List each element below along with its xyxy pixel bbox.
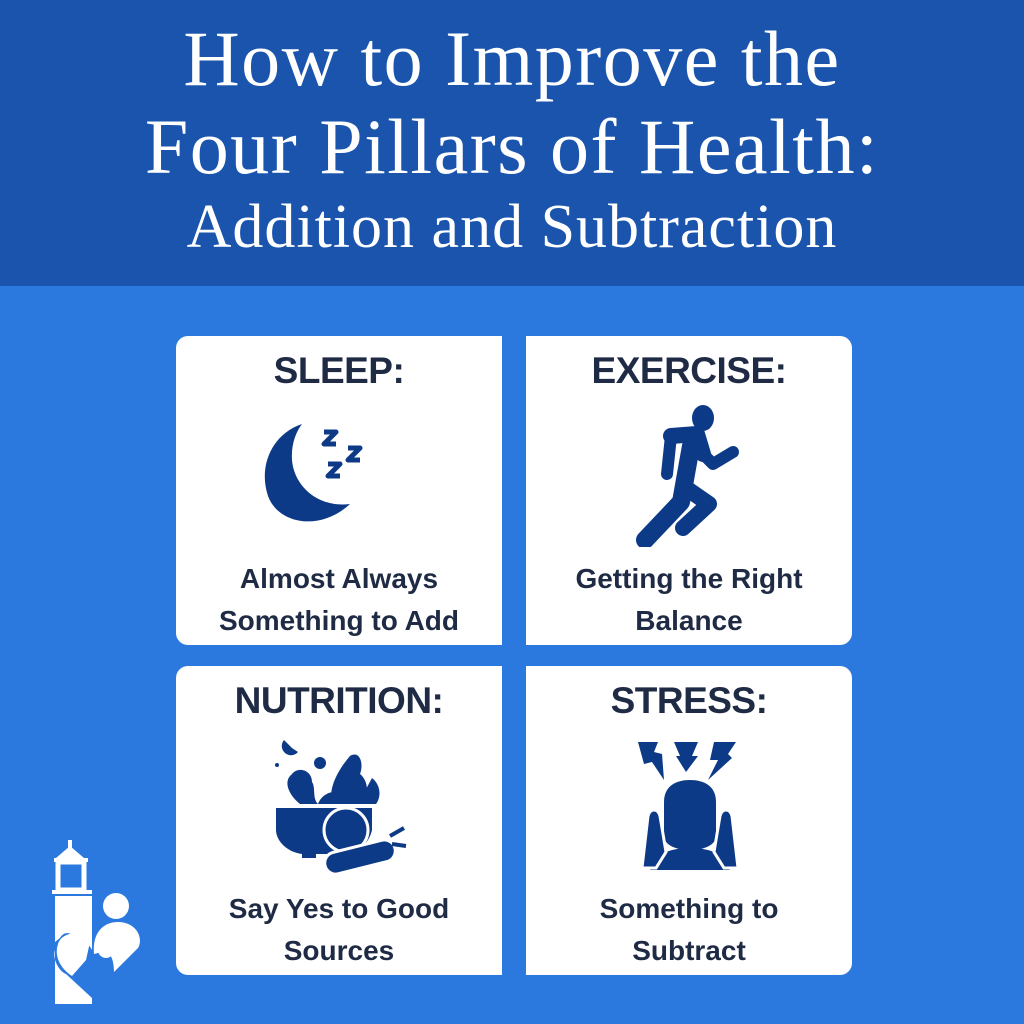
icon: runner	[636, 405, 739, 547]
heading: exercise: EXERCISE:	[592, 350, 786, 391]
text: sleep: Almost Always	[240, 563, 438, 594]
text: nutrition: Say Yes to Good	[229, 893, 449, 924]
logo: lighthouse with family	[52, 840, 140, 1004]
text: stress: Subtract	[632, 935, 746, 966]
text: exercise	[575, 563, 803, 636]
panel: nutrition	[176, 666, 502, 975]
text: sleep: Something to Add	[219, 605, 459, 636]
text: exercise: Balance	[635, 605, 743, 636]
panel: stress	[526, 666, 852, 975]
subtitle: Addition and Subtraction	[187, 193, 837, 261]
text: sleep	[219, 563, 459, 636]
text: exercise: Getting the Right	[575, 563, 803, 594]
text: stress	[600, 893, 778, 966]
icon: salad bowl	[275, 740, 406, 873]
icon: stressed person	[638, 742, 736, 870]
text: nutrition: Sources	[284, 935, 394, 966]
panel: exercise	[526, 336, 852, 645]
title line 1: How to Improve the	[183, 15, 841, 102]
heading: stress: STRESS:	[611, 680, 767, 721]
icon: moon	[264, 424, 362, 522]
title line 2: Four Pillars of Health:	[145, 103, 879, 190]
heading: sleep: SLEEP:	[274, 350, 404, 391]
text: stress: Something to	[600, 893, 778, 924]
heading: nutrition: NUTRITION:	[235, 680, 443, 721]
header band	[0, 0, 1024, 286]
panel: sleep	[176, 336, 502, 645]
text: nutrition	[229, 893, 449, 966]
